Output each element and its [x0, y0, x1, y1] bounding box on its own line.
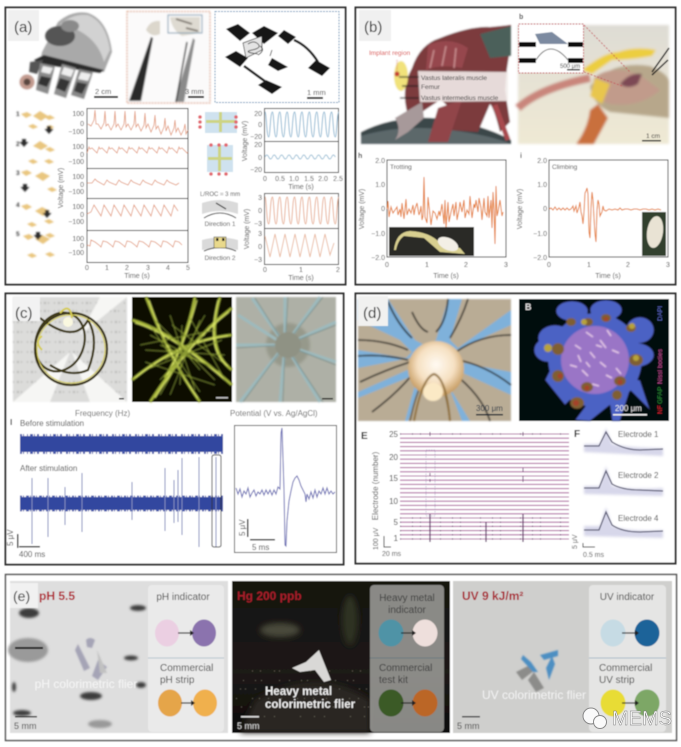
chart: averaged electrode spikes	[572, 428, 663, 559]
panel label (c)	[13, 297, 40, 322]
chart: voltage versus time, blue traces: Time (s)	[288, 184, 314, 191]
photo: helical scaffold micrograph	[13, 297, 127, 402]
card: UV indicators: Commercial	[599, 663, 652, 674]
chart: voltage versus time, blue traces: 0	[263, 176, 267, 183]
photo: heavy metal flier on soil	[232, 581, 450, 733]
chart: spike recordings before and after stimulation: Before stimulation	[20, 419, 84, 428]
card: UV indicators: UV strip	[599, 675, 635, 686]
scale bar: 3 mm: 3 mm	[185, 87, 204, 96]
card: heavy metal indicators: Heavy metal	[379, 593, 435, 604]
photo: rat with implanted device: b	[519, 14, 523, 21]
labels: anatomy annotations: Femur	[421, 84, 441, 91]
panel label (e)	[10, 583, 38, 608]
chart: multi-electrode raster traces: E	[361, 431, 368, 442]
photo: UV flier on gray surface: 5 mm	[457, 721, 480, 731]
scale bar: 2 cm	[94, 87, 118, 98]
chart: five-channel voltage traces: −100	[68, 189, 84, 196]
chart: trotting voltage trace: 1	[425, 262, 429, 269]
photo: hand device	[20, 12, 112, 99]
photo: immunofluorescence of organoid: NF	[657, 405, 664, 414]
chart: voltage versus time, orange traces: −3	[254, 257, 262, 264]
chart: climbing voltage trace: 1.0	[537, 182, 547, 189]
chart: voltage versus time, orange traces: 2	[336, 267, 340, 274]
caption: axis remnants	[75, 409, 318, 418]
chart: five-channel voltage traces: −100	[68, 129, 84, 136]
chart: climbing voltage trace: 0	[543, 206, 547, 213]
icons: five press positions: 3	[16, 170, 20, 177]
labels: anatomy annotations: Implant region	[369, 50, 411, 57]
card: UV indicators: UV indicator	[600, 592, 655, 603]
photo: tweezers holding device	[127, 12, 210, 103]
chart: five-channel voltage traces: Time (s)	[124, 273, 150, 280]
photo: heavy metal flier on soil: colorimetric flier	[265, 699, 356, 711]
card: UV indicators	[589, 585, 666, 732]
diagram: electrode layouts and bending directions: Direction 2	[204, 255, 236, 262]
chart: voltage versus time, orange traces: Time (s)	[288, 275, 314, 282]
chart: multi-electrode raster traces: 20 ms	[382, 551, 402, 558]
chart: climbing voltage trace: 2	[626, 262, 630, 269]
panel label (e): (e)	[13, 588, 30, 604]
photo: immunofluorescence of organoid: 200 μm	[615, 404, 642, 413]
panel: (a) wearable and epidermal sensor	[6, 8, 346, 284]
chart: climbing voltage trace: 1	[587, 262, 591, 269]
chart: trotting voltage trace: Time (s)	[433, 273, 459, 280]
card: heavy metal indicators: Commercial	[379, 663, 432, 674]
chart: voltage versus time, orange traces: 3	[258, 195, 262, 202]
photo: immunofluorescence of organoid: Nissl bodies	[657, 348, 664, 384]
chart: spike recordings before and after stimulation: 400 ms	[19, 550, 45, 559]
chart: single spike waveform: 5 ms	[252, 543, 269, 552]
chart: five-channel voltage traces: 100	[72, 236, 84, 243]
chart: five-channel voltage traces: 0	[80, 182, 84, 189]
icons: five press positions: 4	[16, 202, 20, 209]
icons: five press positions: 2	[16, 141, 20, 148]
watermark: MEMS	[583, 708, 672, 730]
photo: immunofluorescence of organoid	[519, 299, 669, 421]
photo: UV flier on gray surface: UV 9 kJ/m²	[462, 589, 523, 603]
photo: rat with implanted device	[518, 14, 669, 144]
chart: spike recordings before and after stimulation: 5 μV	[6, 529, 15, 546]
chart: trotting voltage trace: −2.0	[371, 255, 385, 262]
chart: multi-electrode raster traces: 20	[389, 453, 399, 462]
diagram: electrode layouts and bending directions	[198, 112, 240, 262]
chart: voltage versus time, orange traces: −3	[254, 221, 262, 228]
chart: five-channel voltage traces: −100	[68, 219, 84, 226]
chart: averaged electrode spikes: F	[574, 429, 580, 440]
diagram: electrode layouts and bending directions: L/ROC = 3 mm	[200, 192, 240, 198]
chart: voltage versus time, blue traces: Voltage (mV)	[242, 121, 249, 161]
chart: voltage versus time, blue traces: −20	[250, 167, 262, 174]
panel: (d) spheroid electrode recording	[356, 294, 676, 564]
panel: (b) implantable sensor on rat muscle	[356, 8, 676, 284]
chart: climbing voltage trace: Climbing	[552, 164, 578, 171]
photo: pH flier in water drops: pH 5.5	[39, 589, 75, 603]
chart: five-channel voltage traces: 5	[186, 265, 190, 272]
chart: multi-electrode raster traces	[361, 430, 569, 558]
chart: voltage versus time, blue traces: 0	[258, 155, 262, 162]
photo: electrode shell around sphere: 300 μm	[476, 404, 503, 413]
panel label (a): (a)	[14, 19, 32, 36]
chart: climbing voltage trace: −2.0	[533, 255, 547, 262]
chart: multi-electrode raster traces: Electrode (number)	[371, 451, 380, 520]
photo: pH flier in water drops: pH colorimetric flier	[35, 677, 137, 691]
watermark: MEMS: MEMS	[612, 708, 672, 730]
chart: voltage versus time, blue traces: 20	[254, 142, 262, 149]
chart: voltage versus time, orange traces: 3	[258, 231, 262, 238]
chart: five-channel voltage traces: 100	[72, 204, 84, 211]
chart: five-channel voltage traces: 0	[80, 152, 84, 159]
chart: single spike waveform	[234, 426, 336, 552]
chart: voltage versus time, blue traces: −20	[250, 134, 262, 141]
card: heavy metal indicators: indicator	[388, 605, 427, 616]
chart: five-channel voltage traces: −100	[68, 250, 84, 257]
chart: five-channel voltage traces: 100	[72, 111, 84, 118]
chart: averaged electrode spikes: 5 μV	[572, 534, 579, 549]
chart: voltage versus time, blue traces: 2.5	[333, 176, 343, 183]
photo: UV flier on gray surface: UV colorimetric flier	[482, 688, 586, 702]
card: pH indicators: Commercial	[160, 663, 213, 674]
labels: anatomy annotations: Vastus intermedius muscle	[421, 95, 499, 102]
photo: electrode shell around sphere	[358, 299, 511, 421]
chart: five-channel voltage traces: −100	[68, 159, 84, 166]
chart: averaged electrode spikes: Electrode 2	[618, 471, 659, 480]
panel: (e) colorimetric fliers	[6, 574, 676, 740]
chart: climbing voltage trace: 2.0	[537, 158, 547, 165]
photo: fluorescent neural network	[132, 297, 232, 402]
panel label (d)	[358, 296, 388, 326]
photo: brightfield micrograph	[236, 297, 336, 402]
chart: voltage versus time, orange traces	[244, 194, 340, 282]
panel label (d): (d)	[363, 305, 381, 322]
chart: voltage versus time, blue traces: 1.0	[289, 176, 299, 183]
photo: immunofluorescence of organoid: GFAP	[657, 387, 664, 404]
chart: five-channel voltage traces: 100	[72, 144, 84, 151]
chart: multi-electrode raster traces: 5	[394, 518, 399, 527]
chart: multi-electrode raster traces: 100 μV	[373, 527, 380, 550]
chart: trotting voltage trace: Trotting	[390, 164, 412, 171]
photo: pH flier in water drops: 5 mm	[14, 721, 36, 731]
chart: trotting voltage trace: 2.0	[375, 158, 385, 165]
photo: immunofluorescence of organoid: B	[525, 302, 532, 312]
photo: heavy metal flier on soil: Hg 200 ppb	[237, 589, 302, 603]
card: heavy metal indicators	[370, 585, 444, 732]
chart: trotting voltage trace: −1.0	[371, 231, 385, 238]
panel label (a)	[8, 10, 39, 41]
chart: voltage versus time, blue traces	[242, 108, 343, 191]
chart: voltage versus time, blue traces: 1.5	[304, 176, 314, 183]
chart: five-channel voltage traces: Voltage (mV)	[58, 168, 65, 208]
chart: voltage versus time, orange traces: 0	[263, 267, 267, 274]
scale bar: 1 mm: 1 mm	[307, 88, 326, 97]
photo: serpentine electrode array	[215, 12, 339, 102]
card: pH indicators: pH strip	[160, 675, 195, 686]
caption: axis remnants: Potential (V vs. Ag/AgCl)	[230, 409, 318, 418]
chart: trotting voltage trace: 1.0	[375, 182, 385, 189]
chart: five-channel voltage traces: 0	[85, 265, 89, 272]
chart: trotting voltage trace: 3	[504, 262, 508, 269]
chart: climbing voltage trace: Voltage (mV)	[517, 189, 524, 229]
chart: trotting voltage trace	[358, 153, 508, 280]
chart: voltage versus time, blue traces: 2.0	[318, 176, 328, 183]
card: pH indicators: pH indicator	[156, 592, 210, 603]
chart: voltage versus time, orange traces: 1	[299, 267, 303, 274]
photo: UV flier on gray surface	[453, 581, 672, 733]
chart: voltage versus time, orange traces: Voltage (mV)	[244, 209, 251, 249]
chart: climbing voltage trace: 0	[547, 262, 551, 269]
photo: rat with implanted device: 500 μm	[560, 64, 580, 70]
card: heavy metal indicators: test kit	[379, 675, 408, 686]
diagram: electrode layouts and bending directions: Direction 1	[204, 221, 236, 228]
icons: five press positions	[16, 111, 57, 258]
chart: spike recordings before and after stimulation: I	[10, 418, 12, 427]
panel label (c): (c)	[15, 305, 32, 322]
labels: anatomy annotations	[369, 50, 499, 102]
icons: five press positions: 1	[16, 111, 20, 118]
chart: voltage versus time, blue traces: 20	[254, 111, 262, 118]
chart: trotting voltage trace: 0	[385, 262, 389, 269]
chart: trotting voltage trace: 2	[464, 262, 468, 269]
photo: pH flier in water drops	[8, 581, 228, 733]
chart: climbing voltage trace: 3	[666, 262, 670, 269]
chart: voltage versus time, orange traces: 0	[258, 208, 262, 215]
chart: multi-electrode raster traces: 25	[389, 430, 399, 439]
chart: multi-electrode raster traces: 1	[394, 534, 399, 543]
chart: climbing voltage trace: Time (s)	[595, 273, 621, 280]
photo: heavy metal flier on soil: Heavy metal	[265, 686, 332, 698]
chart: multi-electrode raster traces: 15	[389, 474, 399, 483]
chart: five-channel voltage traces: 100	[72, 174, 84, 181]
chart: climbing voltage trace	[517, 153, 670, 280]
chart: averaged electrode spikes: Electrode 1	[618, 430, 659, 439]
card: pH indicators	[148, 585, 224, 732]
chart: trotting voltage trace: Voltage (mV)	[359, 189, 366, 229]
illustration: rat hind limb anatomy	[361, 25, 511, 144]
photo: rat with implanted device: 1 cm	[646, 133, 660, 140]
chart: five-channel voltage traces: 2	[125, 265, 129, 272]
chart: voltage versus time, blue traces: 0	[258, 122, 262, 129]
caption: axis remnants: Frequency (Hz)	[75, 409, 130, 418]
chart: climbing voltage trace: i	[520, 153, 522, 160]
chart: averaged electrode spikes: Electrode 4	[618, 514, 659, 523]
photo: heavy metal flier on soil: 5 mm	[237, 721, 260, 731]
labels: anatomy annotations: Vastus lateralis muscle	[421, 75, 487, 82]
chart: five-channel voltage traces: 0	[80, 212, 84, 219]
chart: single spike waveform: 5 μV	[238, 519, 247, 536]
icons: five press positions: 5	[16, 231, 20, 238]
photo: immunofluorescence of organoid: DAPI	[657, 306, 664, 321]
chart: spike recordings before and after stimulation	[6, 418, 223, 559]
chart: climbing voltage trace: −1.0	[533, 231, 547, 238]
panel label (b): (b)	[364, 19, 382, 36]
chart: voltage versus time, blue traces: 0.5	[275, 176, 285, 183]
chart: five-channel voltage traces: 0	[80, 243, 84, 250]
chart: five-channel voltage traces: 3	[146, 265, 150, 272]
chart: trotting voltage trace: 0	[381, 206, 385, 213]
chart: five-channel voltage traces: 1	[105, 265, 109, 272]
chart: five-channel voltage traces	[58, 108, 190, 280]
chart: five-channel voltage traces: 4	[166, 265, 170, 272]
panel: (c) neural network recording	[6, 294, 344, 564]
chart: five-channel voltage traces: 0	[80, 121, 84, 128]
panel label (b)	[359, 10, 391, 41]
chart: averaged electrode spikes: 0.5 ms	[583, 552, 605, 559]
chart: trotting voltage trace: h	[358, 153, 362, 160]
scale bar: 2 cm: 2 cm	[95, 87, 111, 96]
chart: spike recordings before and after stimulation: After stimulation	[20, 464, 77, 473]
chart: multi-electrode raster traces: 10	[389, 497, 399, 506]
chart: voltage versus time, orange traces: 0	[258, 244, 262, 251]
